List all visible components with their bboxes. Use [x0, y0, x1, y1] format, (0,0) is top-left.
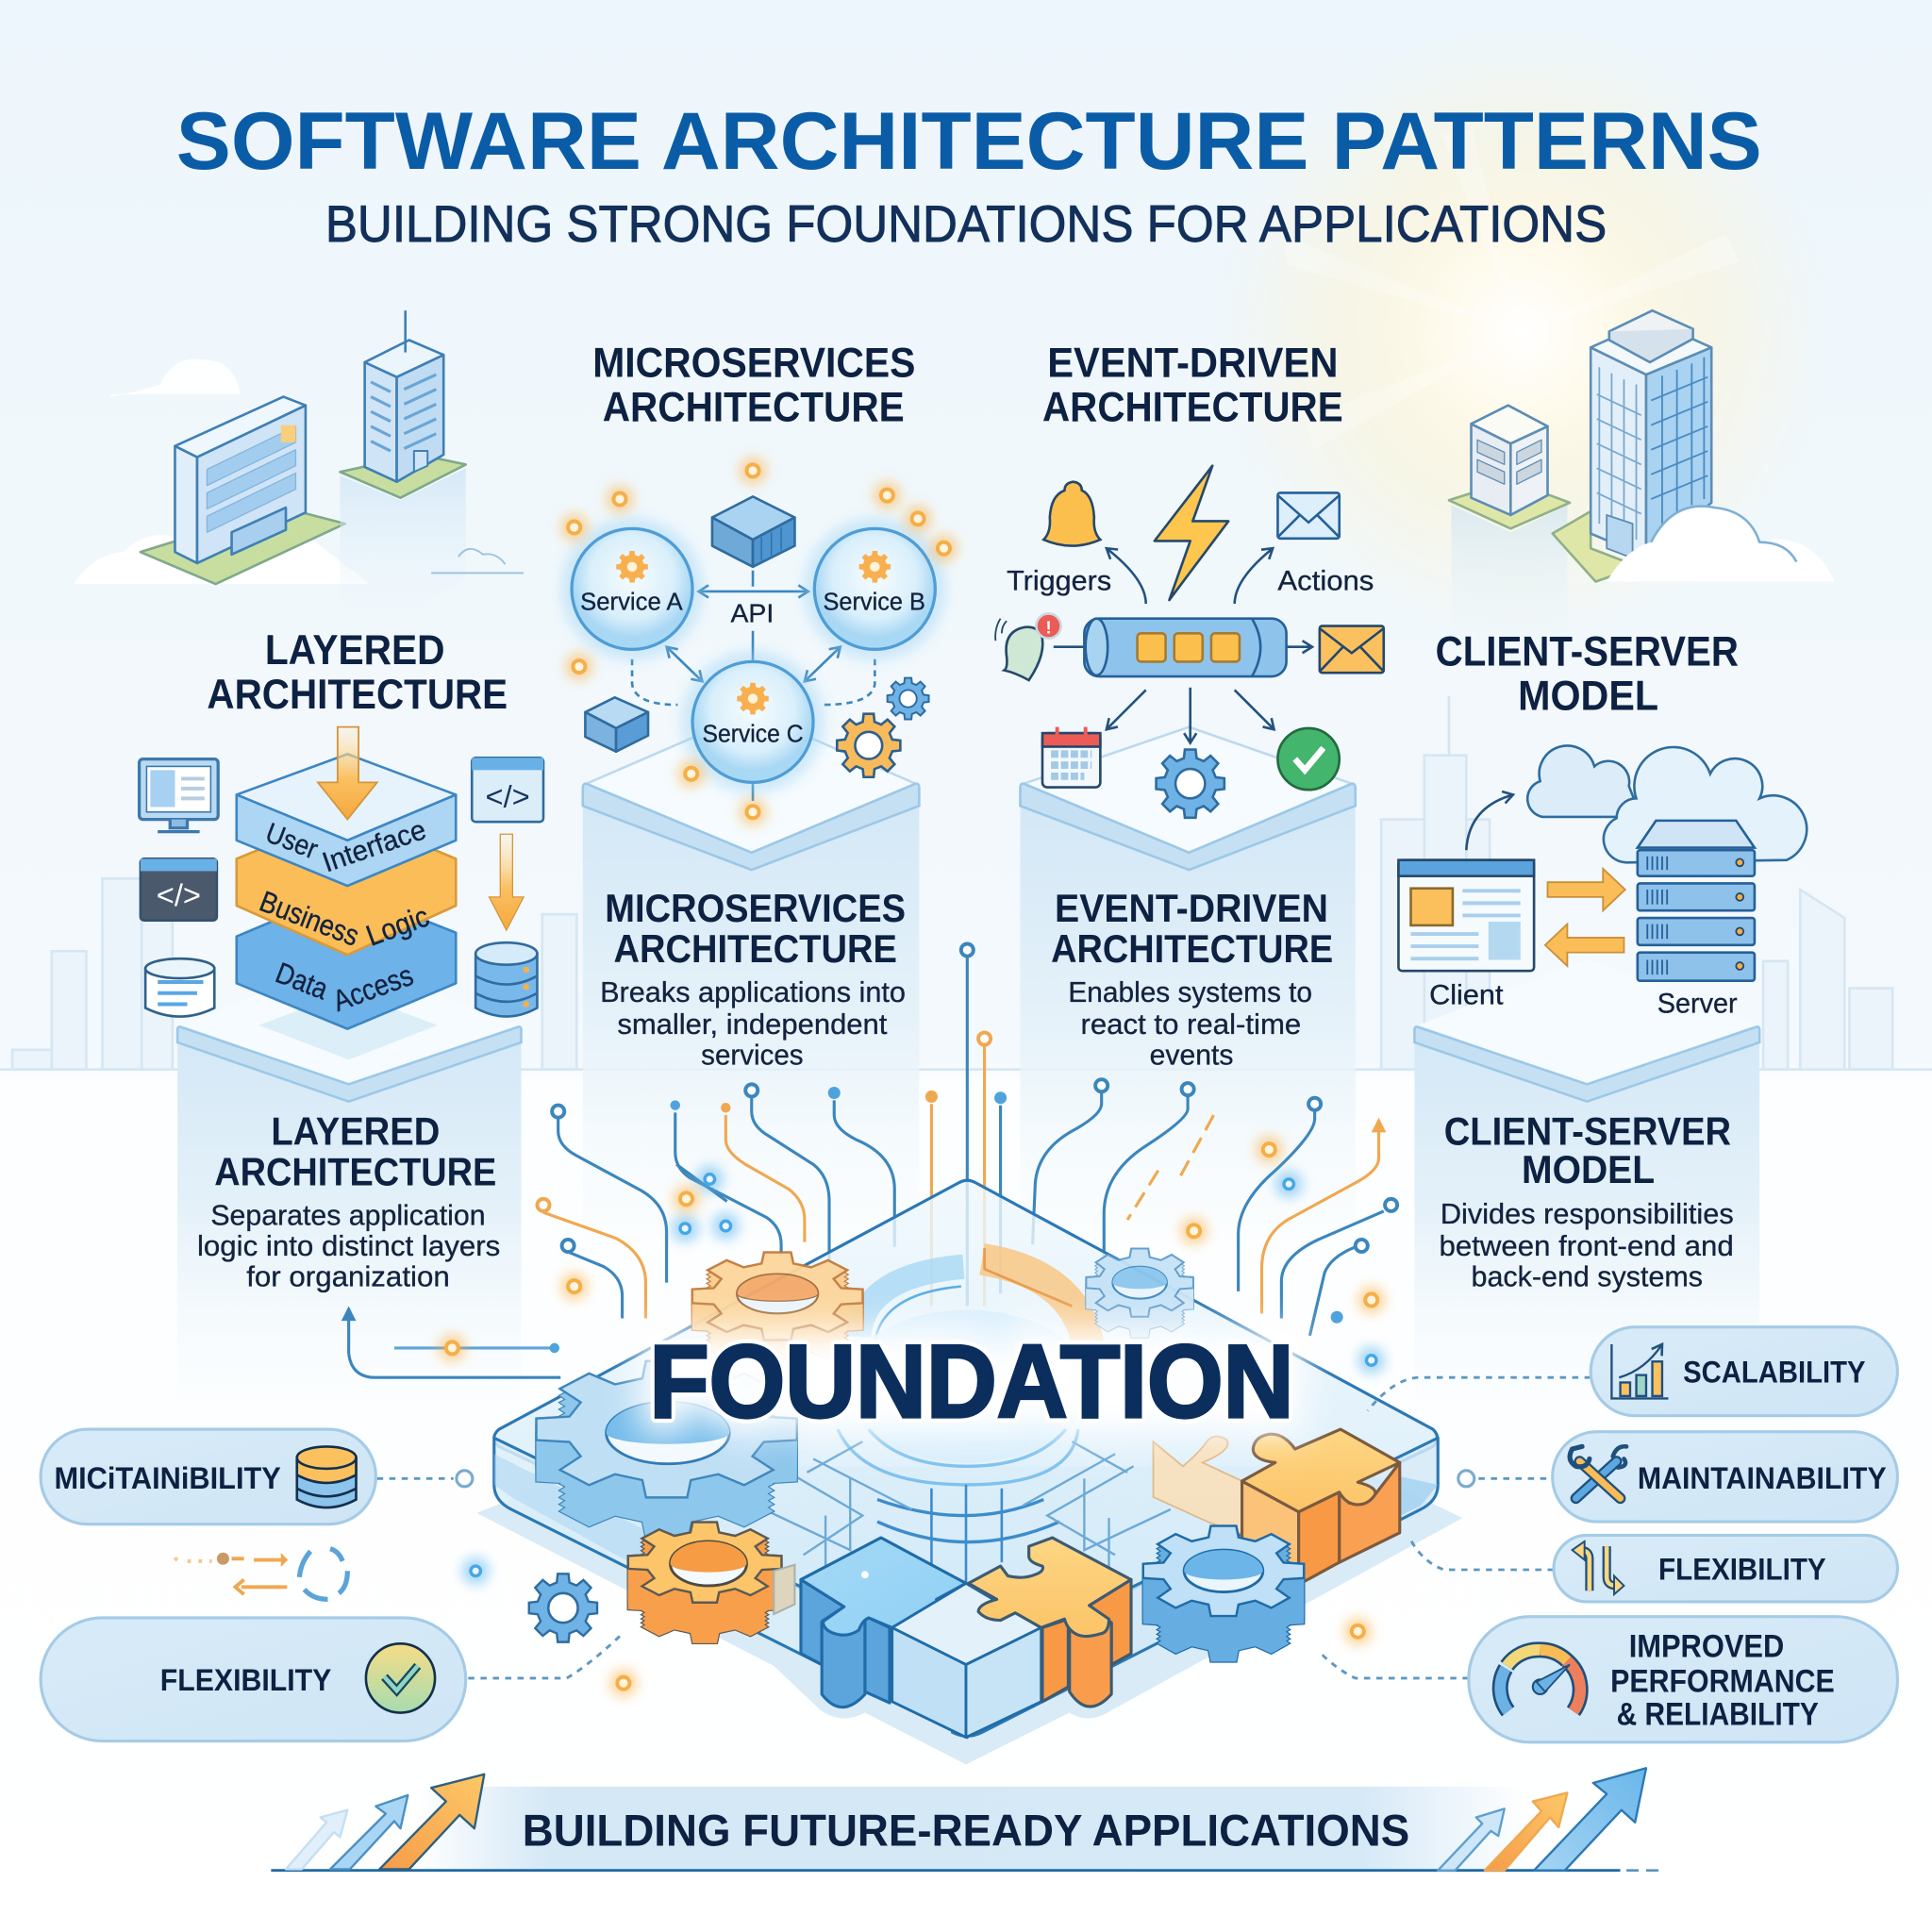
arrows: left growth — [286, 1774, 484, 1869]
arrow: client to cloud — [1466, 794, 1513, 850]
panel text: layered: ARCHITECTURE — [214, 1149, 496, 1193]
panel text: event-driven: events — [1150, 1038, 1233, 1071]
panel text: microservices: smaller, independent — [617, 1008, 888, 1041]
icon: clouds — [1527, 745, 1807, 862]
pill: performance: IMPROVED — [1629, 1629, 1784, 1665]
icon: lightning bolt — [1155, 466, 1228, 600]
heading: event-driven: ARCHITECTURE — [1042, 385, 1343, 431]
arrow: request — [1547, 869, 1625, 910]
illustration: towers right — [1449, 310, 1835, 641]
icon: database — [475, 942, 537, 1017]
pill: flexibility right — [1554, 1535, 1897, 1602]
heading: layered: LAYERED — [265, 627, 445, 674]
arrows: right growth — [1438, 1768, 1646, 1871]
pill: left maintainability: MICiTAINiBILITY — [54, 1460, 281, 1495]
arrow: response — [1545, 924, 1624, 966]
pill: scalability — [1591, 1327, 1897, 1416]
gear: back blue — [1086, 1249, 1193, 1338]
panel text: client-server: CLIENT-SERVER — [1444, 1108, 1731, 1153]
service c — [681, 651, 824, 793]
center rings — [764, 1248, 1171, 1583]
server stack — [1638, 821, 1755, 981]
panel: microservices pillar — [583, 712, 919, 1244]
icon: calendar — [1042, 727, 1100, 788]
heading: client-server: MODEL — [1518, 673, 1658, 719]
icon: orange gear — [837, 714, 900, 777]
puzzle: faded back piece — [1154, 1437, 1242, 1534]
panel text: microservices — [600, 886, 906, 1071]
arrow: to database — [490, 834, 524, 930]
label: user interface: Interface — [319, 814, 430, 878]
label: data access: Data — [271, 957, 333, 1007]
pill: scalability: SCALABILITY — [1683, 1354, 1866, 1389]
panel text: event-driven: ARCHITECTURE — [1051, 926, 1333, 971]
panel: client-server pillar — [1414, 958, 1759, 1411]
panel text: event-driven: Enables systems to — [1068, 975, 1312, 1008]
panel: event-driven pillar — [1020, 727, 1356, 1244]
service b: Service B — [823, 590, 925, 616]
connector nodes — [457, 1471, 1474, 1487]
pill: left flexibility — [41, 1618, 466, 1741]
panel text: microservices: ARCHITECTURE — [613, 926, 897, 971]
pill: performance: PERFORMANCE — [1610, 1663, 1835, 1699]
client window — [1398, 860, 1534, 971]
pill: flexibility right: FLEXIBILITY — [1658, 1551, 1826, 1586]
label: data access: Access — [328, 958, 418, 1018]
diagram: microservices — [560, 458, 958, 825]
foundation label: FOUNDATION — [649, 1324, 1293, 1440]
service a — [560, 518, 704, 660]
icon: document cylinder — [145, 958, 214, 1017]
panel text: layered: LAYERED — [271, 1108, 440, 1153]
service a: Service A — [580, 590, 683, 616]
skyline background — [0, 696, 1932, 1070]
foundation platform — [476, 1180, 1462, 1764]
circuit traces — [543, 957, 1384, 1336]
service c: Service C — [702, 721, 804, 747]
banner — [271, 1787, 1663, 1871]
icon: bell — [1043, 482, 1100, 546]
subtitle: BUILDING STRONG FOUNDATIONS FOR APPLICATIONS — [325, 194, 1607, 253]
puzzle: right orange piece — [1242, 1429, 1400, 1585]
label: client: Client — [1429, 979, 1504, 1010]
pill: left flexibility: FLEXIBILITY — [160, 1662, 332, 1697]
panel text: event-driven: EVENT-DRIVEN — [1055, 886, 1328, 930]
pill: maintainability — [1553, 1432, 1897, 1522]
connectors: dotted — [377, 1377, 1591, 1678]
platform shadow — [476, 1466, 1462, 1764]
icon: dark code window — [141, 858, 217, 921]
icon: queue — [1084, 619, 1287, 676]
icon: small flow arrows — [175, 1549, 347, 1599]
pill: performance — [1469, 1617, 1897, 1742]
gear: front orange — [628, 1523, 781, 1643]
connector: layered to foundation — [341, 1306, 560, 1377]
heading: event-driven: EVENT-DRIVEN — [1047, 341, 1338, 387]
gear: big blue — [537, 1361, 797, 1539]
diagram: layered stack — [237, 754, 456, 1029]
panel text: event-driven: react to real-time — [1080, 1008, 1301, 1041]
heading: layered: ARCHITECTURE — [207, 672, 508, 718]
heading: client-server: CLIENT-SERVER — [1436, 628, 1739, 675]
heading: microservices: MICROSERVICES — [592, 341, 915, 387]
small tan box — [774, 1565, 794, 1614]
icon: gear — [1157, 750, 1224, 818]
icon: monitor — [140, 759, 218, 832]
illustration: office buildings left — [74, 310, 524, 616]
service b — [804, 518, 946, 660]
label: data access — [271, 957, 418, 1018]
panel text: client-server — [1440, 1108, 1734, 1293]
icon: light code window — [472, 758, 543, 822]
foundation label: FOUNDATION — [649, 1324, 1293, 1440]
platform slab — [494, 1180, 1438, 1738]
icon: container — [712, 496, 794, 567]
panel: layered pillar — [177, 958, 521, 1411]
pill: performance: & RELIABILITY — [1617, 1697, 1819, 1733]
panel text: microservices: Breaks applications into — [600, 975, 906, 1008]
service links — [632, 571, 874, 801]
glow dots — [560, 458, 958, 825]
panel text: layered: for organization — [246, 1260, 450, 1293]
icon: green check — [1277, 728, 1340, 790]
pill: left maintainability — [41, 1429, 375, 1524]
gear: front blue — [1143, 1526, 1304, 1661]
icon: dark code window: </> — [157, 877, 201, 912]
gear: back orange — [692, 1253, 862, 1367]
banner text: BUILDING FUTURE-READY APPLICATIONS — [523, 1806, 1409, 1856]
diagram: client-server — [1398, 745, 1807, 1020]
puzzle: center slab block — [892, 1583, 1041, 1738]
label: triggers: Triggers — [1007, 566, 1111, 597]
panel text: layered: logic into distinct layers — [197, 1229, 500, 1262]
puzzle: orange piece — [969, 1538, 1131, 1707]
panel text: client-server: MODEL — [1522, 1147, 1655, 1191]
icon: notification: ! — [1045, 617, 1052, 637]
icon: small container — [585, 697, 648, 752]
label: server: Server — [1657, 989, 1738, 1020]
icon: notification — [995, 613, 1061, 680]
foundation label: FOUNDATION — [649, 1324, 1293, 1440]
label: user interface: User — [261, 818, 322, 865]
circuit nodes — [462, 943, 1397, 1697]
event arrows — [1054, 548, 1312, 743]
api label: API — [731, 599, 774, 628]
panel text: layered: Separates application — [210, 1198, 486, 1231]
puzzle: blue piece — [801, 1538, 966, 1707]
panel text: microservices: services — [701, 1038, 804, 1071]
panel text: client-server: back-end systems — [1472, 1260, 1703, 1293]
icon: outline gear — [529, 1574, 597, 1642]
heading: microservices: ARCHITECTURE — [603, 385, 905, 431]
diagram: event-driven — [995, 466, 1384, 818]
label: user interface — [261, 814, 430, 878]
panel text: client-server: between front-end and — [1440, 1229, 1734, 1262]
arrow: into stack — [318, 727, 377, 820]
icon: orange envelope — [1320, 626, 1384, 673]
panel text: event-driven — [1051, 886, 1333, 1071]
icon: light code window: </> — [486, 779, 530, 814]
icon: blue gear — [888, 678, 929, 720]
label: actions: Actions — [1277, 566, 1374, 597]
label: business logic: Logic — [362, 900, 433, 953]
label: business logic — [255, 885, 433, 953]
pill: maintainability: MAINTAINABILITY — [1638, 1460, 1887, 1495]
panel text: client-server: Divides responsibilities — [1441, 1197, 1734, 1230]
panel text: microservices: MICROSERVICES — [605, 886, 906, 930]
label: business logic: Business — [255, 885, 363, 953]
icon: envelope — [1277, 492, 1340, 539]
title: SOFTWARE ARCHITECTURE PATTERNS — [176, 96, 1762, 187]
panel text: layered — [197, 1108, 500, 1293]
